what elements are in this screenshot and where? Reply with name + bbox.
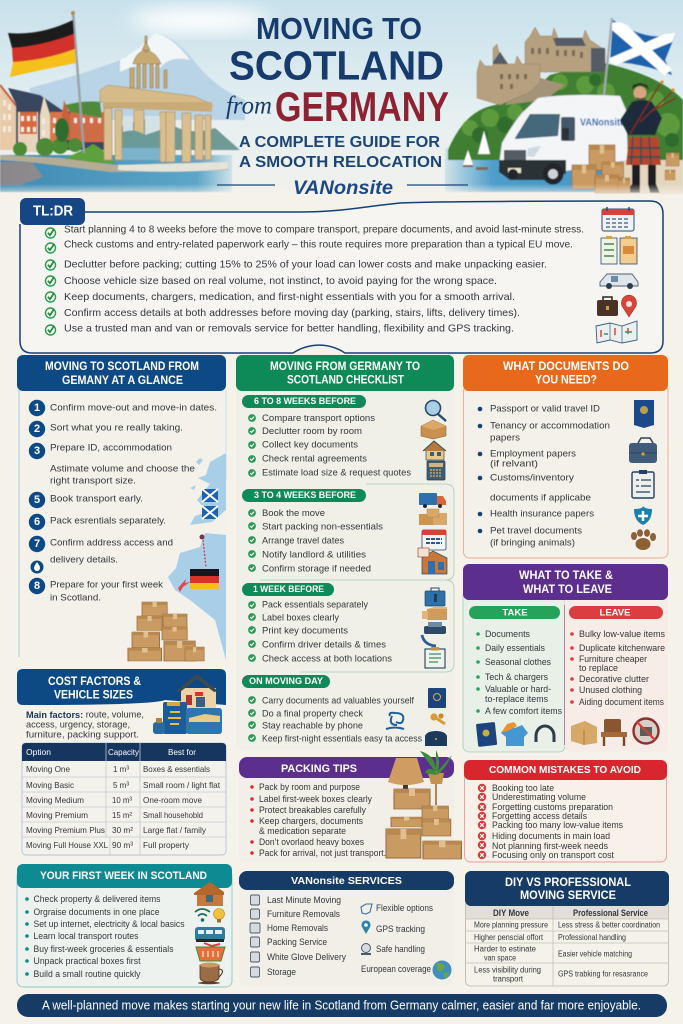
vehicle table: Boxes & essentials: [143, 764, 210, 774]
numbered steps: Astimate volume and choose the: [50, 464, 195, 474]
icon: suitcase: [597, 297, 618, 316]
icon: calendar: [602, 207, 634, 231]
icon: luggage: [153, 702, 222, 734]
heading: VANonsite SERVICES: [291, 875, 402, 887]
lamp: [388, 758, 424, 791]
documents list: (if relvant): [490, 458, 538, 470]
take column: TAKE: [502, 608, 528, 618]
icon: no sign: [634, 718, 658, 744]
numbered steps: Pack esrentials separately.: [50, 516, 166, 526]
TL:DR points: Choose vehicle size based on real volume, not instinct, to avoid paying for the wrong space.: [64, 275, 497, 287]
service benefits: European coverage: [361, 964, 431, 974]
documents list: (if bringing animals): [490, 538, 575, 548]
TL:DR points: Confirm access details at both addresses before moving day (parking, stairs, lifts, delivery times).: [64, 307, 520, 319]
castle: [477, 27, 605, 105]
numbered steps: Book transport early.: [50, 494, 143, 504]
section: 1 week before: Check access at both locations: [262, 654, 392, 664]
tips list: [250, 782, 386, 858]
right scene: Scottish landmarks: [445, 18, 683, 194]
numbered steps: 8: [34, 580, 40, 592]
boats: [478, 131, 490, 154]
title: [226, 11, 449, 171]
comparison table: GPS trabking for resasrance: [558, 970, 648, 978]
TL:DR tab: TL:DR: [33, 202, 73, 220]
section: on moving day: ON MOVING DAY: [249, 676, 324, 687]
Scottish flag: [610, 20, 676, 75]
section: 3 to 4 weeks before: 3 TO 4 WEEKS BEFORE: [254, 490, 357, 501]
section: 6 to 8 weeks before: Estimate load size & request quotes: [262, 468, 411, 478]
service benefits: Safe handling: [376, 944, 425, 954]
numbered steps: Prepare ID, accommodation: [50, 442, 172, 454]
vehicle table: Large flat / family: [143, 825, 207, 835]
section: on moving day: Keep first-night essentials easy ta access: [262, 734, 422, 744]
icon: calendar: [422, 530, 446, 550]
title: MOVING TO: [256, 11, 422, 46]
heading: [236, 355, 454, 391]
TL:DR tab: [20, 198, 85, 225]
heading: DIY VS PROFESSIONAL: [505, 877, 631, 889]
map illustration: [168, 453, 226, 660]
comparison table: Professional handling: [558, 933, 626, 942]
vehicle table: Moving Basic: [26, 780, 74, 790]
main factors text: furniture, packing support.: [26, 730, 139, 740]
icon: light bulb: [214, 908, 224, 922]
vehicle table: 5 m³: [113, 780, 129, 790]
comparison table: Less visibility during: [474, 966, 541, 974]
section: 1 week before: Print key documents: [262, 626, 348, 636]
flag pole: [604, 18, 612, 95]
heading: WHAT TO TAKE &: [519, 570, 613, 582]
documents list: Customs/inventory: [490, 472, 574, 484]
icon: chair: [601, 719, 627, 746]
mistakes list: Not planning first-week needs: [492, 841, 608, 851]
section: on moving day: Carry documents ad valuables yourself: [262, 696, 414, 706]
numbered steps: delivery details.: [50, 554, 118, 566]
main factors text: access, urgency, storage,: [26, 720, 130, 730]
icon: location pin: [622, 295, 636, 317]
numbered steps: Confirm address access and: [50, 538, 173, 548]
title: SCOTLAND: [229, 42, 444, 88]
panel: cost factors and vehicle sizes: [17, 669, 226, 855]
leave column: Duplicate kitchenware: [579, 643, 665, 653]
panel: at a glance: [17, 355, 226, 661]
heading: PACKING TIPS: [281, 763, 357, 775]
section: 6 to 8 weeks before: [242, 395, 446, 480]
panel: common mistakes: [464, 760, 667, 862]
heading: SCOTLAND CHECKLIST: [287, 374, 404, 386]
leave column: Unused clothing: [579, 685, 642, 695]
vehicle table: Small househobld: [143, 810, 203, 820]
services list: Packing Service: [267, 937, 327, 947]
icon: house: [194, 882, 224, 906]
panel: packing tips: [239, 750, 461, 862]
icon: box: [422, 607, 447, 620]
footer banner: [17, 994, 667, 1017]
comparison table: DIY Move: [493, 908, 529, 918]
icon: headphones: [536, 726, 554, 742]
list: Learn local transport routes: [34, 931, 139, 941]
documents list: Employment papers: [490, 448, 576, 460]
icon: map: [596, 321, 637, 343]
comparison table: Professional Service: [573, 908, 648, 918]
icon: calculator: [427, 461, 445, 480]
heading: WHAT TO LEAVE: [523, 584, 612, 596]
icon: bag: [425, 731, 447, 746]
numbered steps: Prepare for your first week: [50, 580, 163, 590]
heading: [17, 669, 226, 705]
tips list: Don’t ovorlaod heavy boxes: [259, 837, 364, 847]
section: 3 to 4 weeks before: Book the move: [262, 508, 325, 519]
section: 6 to 8 weeks before: Compare transport options: [262, 413, 375, 424]
mistakes list: Focusing only on transport cost: [492, 850, 614, 860]
section: 6 to 8 weeks before: 6 TO 8 WEEKS BEFORE: [254, 396, 357, 407]
panel: documents needed: [463, 355, 668, 558]
list: Buy first-week groceries & essentials: [34, 944, 174, 954]
tips list: Pack for arrival, not just transport.: [259, 848, 386, 858]
comparison table: van space: [484, 954, 516, 962]
icon: clipboards: [601, 236, 637, 264]
plant: [420, 750, 452, 805]
icon: phone cable: [386, 713, 404, 729]
icon: clipboard: [632, 470, 654, 498]
section: 3 to 4 weeks before: [242, 489, 447, 574]
icon: boxes: [419, 509, 447, 525]
leave column: [565, 590, 668, 752]
vehicle table: 1 m³: [113, 764, 129, 774]
comparison table: Easier vehicle matching: [558, 950, 632, 958]
vehicle table: One-room move: [143, 795, 202, 805]
icon: briefcase: [629, 438, 657, 463]
take column: A few comfort items: [485, 706, 562, 716]
icon: paw print: [631, 529, 656, 550]
stacked boxes: [386, 789, 461, 859]
tips list: Protect breakables carefully: [259, 805, 366, 815]
take column: Documents: [485, 629, 530, 639]
leave column: Furniture cheaper: [579, 654, 647, 664]
icon: wifi: [195, 909, 210, 921]
documents list: [478, 404, 610, 548]
TL:DR points: Keep documents, chargers, medication, and first-night essentials with you for a smooth arrival.: [64, 291, 515, 303]
section: 1 week before: Pack essentials separately: [262, 600, 368, 610]
service benefits: Flexible options: [376, 903, 433, 913]
main factors text: [26, 710, 144, 740]
icon: box: [421, 420, 446, 439]
heading: MOVING TO SCOTLAND FROM: [45, 361, 199, 373]
section: 6 to 8 weeks before: Check rental agreements: [262, 454, 367, 464]
tips list: & medication separate: [259, 826, 346, 836]
numbered steps: in Scotland.: [50, 592, 101, 604]
icon: passport: [634, 400, 654, 428]
take column: Tech & chargers: [485, 672, 548, 682]
vehicle table: Moving Full House XXL: [26, 840, 108, 850]
icon: house: [423, 441, 446, 460]
leave column: Decorative clutter: [579, 674, 649, 684]
piper: [620, 80, 676, 193]
services list: [250, 895, 346, 977]
services list: Furniture Removals: [267, 909, 340, 919]
section: on moving day: [242, 675, 447, 746]
list: Build a small routine quickly: [34, 969, 141, 979]
leave column: Aiding document items: [579, 697, 664, 707]
icon: coffee cup: [198, 962, 222, 984]
TL:DR check marks: [46, 228, 56, 335]
take column: Daily essentials: [485, 643, 545, 653]
icon: passport: [476, 722, 497, 747]
heading: MOVING SERVICE: [520, 890, 616, 902]
icon: house: [176, 674, 218, 712]
comparison table: Harder to estinate: [474, 944, 537, 954]
take column: to-replace items: [485, 694, 548, 704]
numbered steps: Confirm move-out and move-in dates.: [50, 402, 217, 414]
section: 1 week before: 1 WEEK BEFORE: [253, 584, 325, 595]
tips list: Pack by room and purpose: [259, 782, 360, 792]
numbered steps: 5: [34, 494, 40, 506]
documents list: Pet travel documents: [490, 526, 582, 536]
section: 6 to 8 weeks before: Declutter room by room: [262, 426, 362, 437]
numbered steps: 2: [34, 423, 40, 435]
leave column: Bulky low-value items: [579, 629, 665, 639]
icon: storage unit: [418, 548, 447, 574]
vehicle table: Small room / light flat: [143, 780, 221, 790]
vehicle table: Moving Premium: [26, 810, 88, 820]
vehicle table: Moving One: [26, 764, 70, 774]
icon: shirt: [501, 722, 528, 746]
icon: printer: [424, 622, 446, 634]
heading: [17, 864, 232, 888]
brand logo VANonsite: VANonsite: [293, 178, 393, 199]
numbered steps: [29, 400, 217, 604]
vehicle table: Full property: [143, 840, 190, 850]
section: on moving day: Do a final property check: [262, 708, 363, 720]
heading: WHAT DOCUMENTS DO: [503, 361, 629, 373]
vehicle table: Moving Premium Plus: [26, 825, 105, 835]
panel: TL:DR: [20, 198, 663, 353]
vehicle table: 90 m³: [112, 840, 133, 850]
leave column: LEAVE: [600, 608, 630, 618]
documents list: Passport or valid travel ID: [490, 404, 600, 414]
heading: COST FACTORS &: [48, 674, 141, 688]
TL:DR points: Declutter before packing; cutting 15% to 25% of your load can lower costs and make unpacking easier.: [64, 258, 547, 270]
panel: VANonsite services: [239, 871, 454, 986]
heading: GEMANY AT A GLANCE: [62, 375, 183, 387]
icon: phone: [422, 635, 436, 646]
vehicle table: 15 m²: [112, 810, 132, 820]
heading: VEHICLE SIZES: [54, 688, 133, 702]
tips list: Keep chargers, documents: [259, 816, 363, 826]
numbered steps: Sort what you re really taking.: [50, 422, 183, 434]
list: [25, 894, 185, 979]
mistakes list: [478, 783, 623, 860]
section: 3 to 4 weeks before: Notify landlord & utilities: [262, 550, 366, 560]
section: 3 to 4 weeks before: Start packing non-essentials: [262, 522, 383, 532]
numbered steps: right transport size.: [50, 476, 136, 486]
vehicle table: Capacity: [108, 747, 140, 757]
vehicle table: Option: [26, 747, 51, 757]
vehicle table: [22, 743, 226, 855]
comparison table: Higher penscial offort: [474, 933, 544, 942]
icon: van: [600, 274, 638, 289]
town: [0, 85, 18, 150]
section: on moving day: Stay reachable by phone: [262, 720, 363, 732]
mistakes list: Underestimating volume: [492, 792, 586, 802]
vehicle table: 10 m³: [112, 795, 132, 805]
icon: clipboard: [425, 647, 445, 668]
title: A COMPLETE GUIDE FOR: [239, 134, 440, 151]
comparison table: [466, 900, 668, 986]
services list: Last Minute Moving: [267, 895, 341, 905]
heading: [17, 355, 226, 391]
list: Set up internet, electricity & local basics: [34, 919, 185, 929]
TL:DR points: Use a trusted man and van or removals service for better handling, flexibility and GPS tracking.: [64, 322, 514, 334]
TL:DR points: Start planning 4 to 8 weeks before the move to compare transport, prepare documents, and avoid last-minute stress.: [64, 224, 584, 236]
van logo: VANonsite: [580, 118, 625, 128]
documents list: Health insurance papers: [490, 508, 594, 520]
comparison table: transport: [493, 974, 524, 984]
section: 3 to 4 weeks before: Confirm storage if needed: [262, 564, 371, 574]
list: Orgraise documents in one place: [34, 907, 160, 917]
mistakes list: Forgetting customs preparation: [492, 802, 613, 812]
icon: magnifier: [426, 400, 446, 421]
icon: globe: [432, 960, 452, 980]
stack of boxes: [128, 602, 204, 661]
icon: grocery basket: [196, 943, 225, 961]
TL:DR points: [64, 224, 584, 334]
TL:DR points: Check customs and entry-related paperwork early – this route requires more preparation than a typical EU move.: [64, 238, 573, 250]
mistakes list: Forgetting access details: [492, 811, 587, 821]
hero banner illustration: [0, 0, 683, 198]
leave column: to replace: [579, 663, 618, 673]
heading: YOUR FIRST WEEK IN SCOTLAND: [40, 870, 207, 882]
section: 1 week before: Label boxes clearly: [262, 612, 339, 624]
icon: open box: [571, 721, 597, 745]
vehicle table: Best for: [168, 747, 196, 757]
service benefits: GPS tracking: [376, 924, 425, 934]
lamp posts/flag pole: [73, 12, 84, 153]
heading: COMMON MISTAKES TO AVOID: [489, 764, 641, 776]
Brandenburg gate: [100, 36, 212, 162]
panel: moving checklist: [236, 355, 454, 750]
icon: shield: [634, 506, 652, 525]
heading: MOVING FROM GERMANY TO: [270, 361, 420, 373]
heading: [464, 760, 667, 780]
icon: keys: [430, 713, 445, 724]
services list: Home Removals: [267, 923, 328, 933]
take column: Seasonal clothes: [485, 657, 551, 667]
title: from: [226, 92, 272, 120]
take column: [463, 590, 565, 752]
icon: bus: [195, 927, 225, 942]
heading: [465, 871, 669, 906]
services list: Storage: [267, 967, 296, 977]
service benefits: [361, 903, 433, 974]
vehicle table: Moving Medium: [26, 795, 84, 805]
footer banner: A well-planned move makes starting your new life in Scotland from Germany calmer, easier and far more enjoyable.: [42, 998, 641, 1012]
numbered steps: 3: [34, 445, 40, 457]
documents list: Tenancy or accommodation: [490, 420, 610, 432]
panel: DIY vs professional: [465, 871, 669, 986]
numbered steps: 6: [34, 516, 40, 528]
moving boxes: [572, 145, 679, 193]
heading: YOU NEED?: [535, 374, 597, 386]
heading: [463, 355, 668, 391]
German flag: [8, 20, 74, 48]
van: [499, 95, 628, 184]
services list: White Glove Delivery: [267, 952, 346, 962]
mistakes list: Packing too many low-value items: [492, 820, 623, 830]
heading: [239, 757, 454, 778]
section: 6 to 8 weeks before: Collect key documents: [262, 440, 358, 450]
documents list: documents if applicabe: [490, 492, 591, 504]
panel: first week in Scotland: [17, 864, 232, 987]
numbered steps: 7: [34, 538, 40, 550]
vehicle table: 30 m²: [112, 825, 133, 835]
list: Check property & delivered items: [34, 894, 161, 904]
panel: what to take and leave: [463, 564, 668, 752]
tips list: Label first-week boxes clearly: [259, 794, 372, 804]
main factors text: Main factors: route, volume,: [26, 710, 144, 720]
icon: passport: [428, 688, 446, 708]
section: 3 to 4 weeks before: Arrange travel dates: [262, 536, 344, 546]
title: GERMANY: [275, 83, 449, 130]
comparison table: More planning pressure: [474, 920, 548, 930]
mistakes list: Booking too late: [492, 783, 554, 793]
list: Unpack practical boxes first: [34, 956, 141, 966]
numbered steps: 1: [34, 402, 40, 414]
comparison table: Less stress & better coordination: [558, 920, 660, 930]
heading: [239, 871, 454, 890]
documents list: papers: [490, 432, 520, 444]
heading: [463, 564, 668, 600]
section: 1 week before: Confirm driver details & times: [262, 640, 386, 650]
title: A SMOOTH RELOCATION: [239, 154, 442, 171]
left scene: German landmarks: [0, 8, 270, 192]
section: 1 week before: [242, 583, 447, 668]
icon: truck: [419, 493, 446, 508]
mistakes list: Hiding documents in main load: [492, 831, 610, 841]
icon: suitcase: [425, 588, 445, 606]
take column: Valuable or hard-: [485, 684, 551, 694]
reflections: [0, 162, 43, 185]
